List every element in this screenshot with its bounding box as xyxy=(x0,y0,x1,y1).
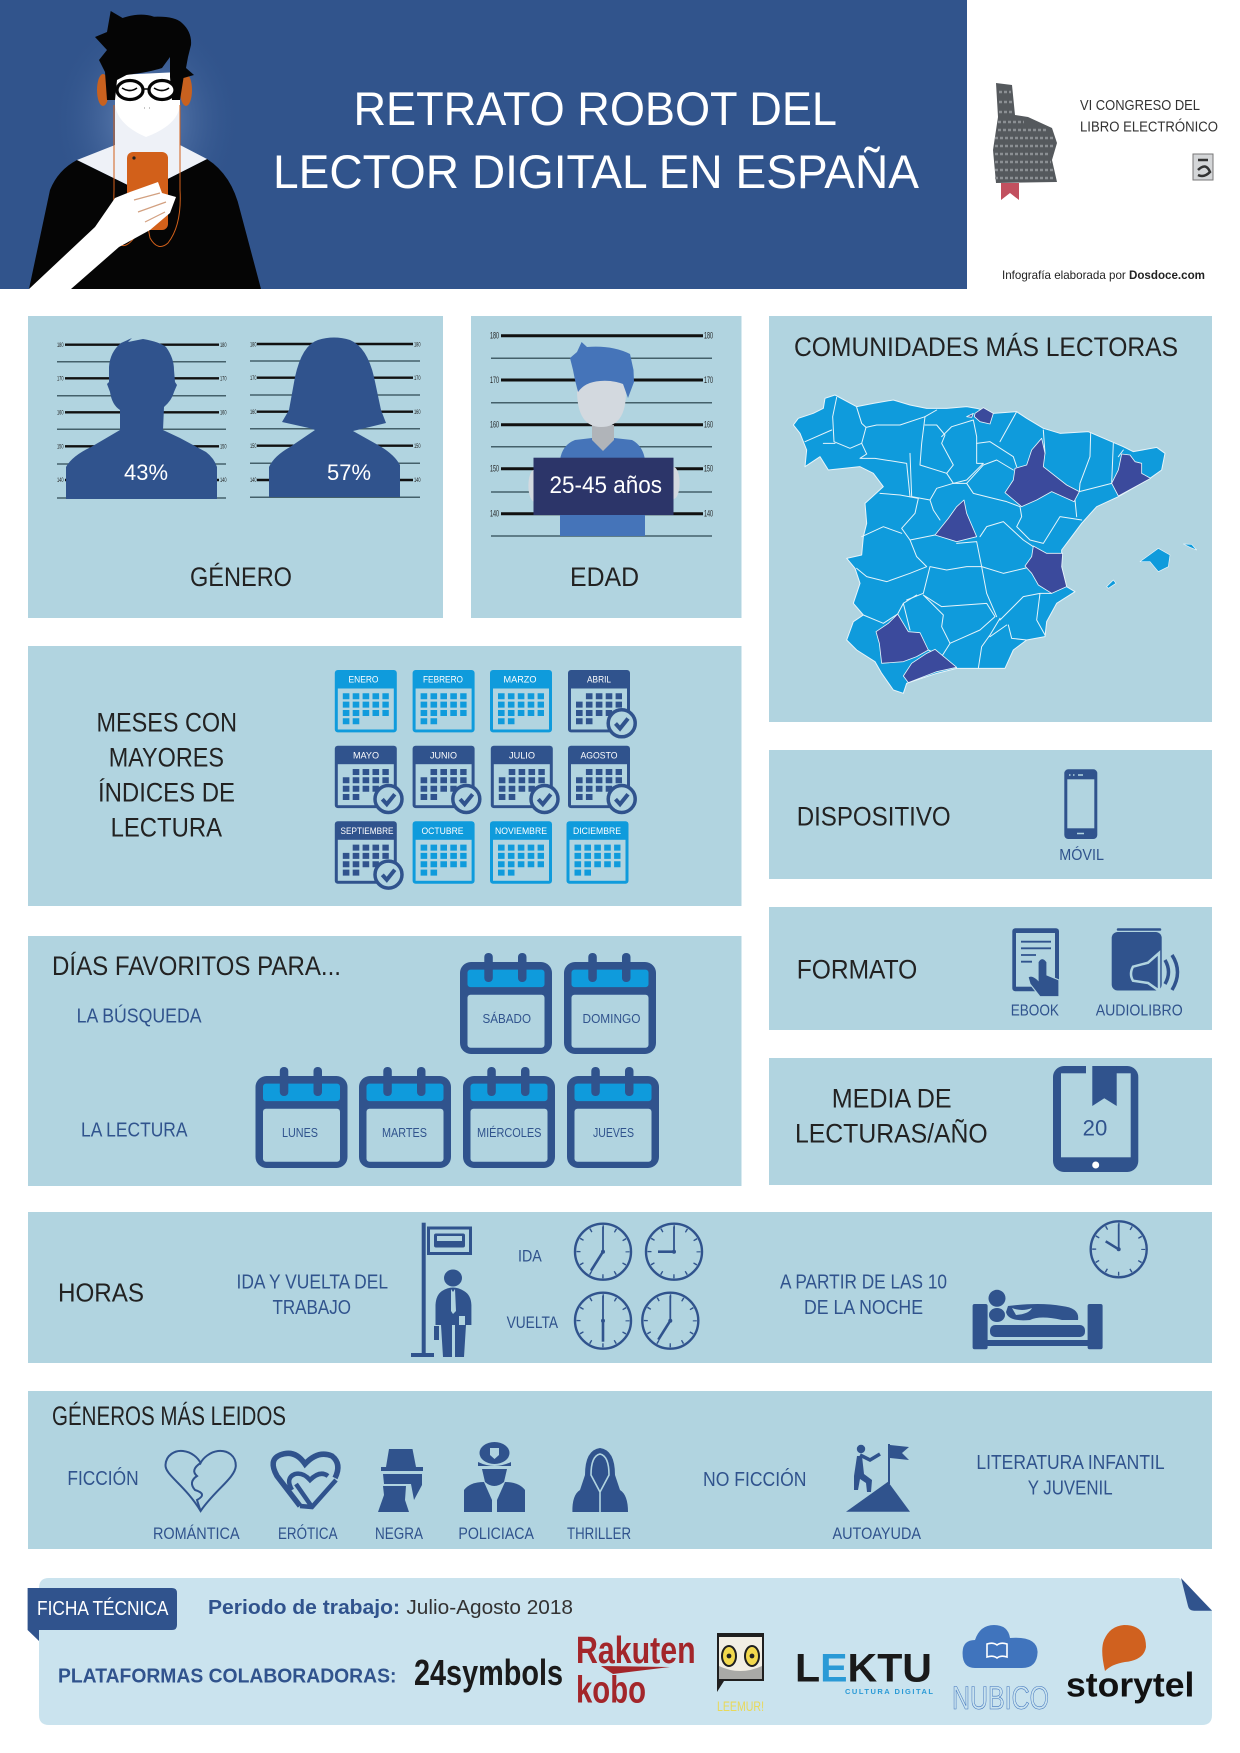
height chart: male xyxy=(57,343,227,498)
calendar icons: days: JUEVES xyxy=(593,1126,634,1140)
illustration: reader with phone and headphones xyxy=(29,11,261,289)
calendar icons: days: LUNES xyxy=(282,1126,318,1140)
label: negra: NEGRA xyxy=(375,1524,424,1543)
logo: lektu: LEKTU xyxy=(795,1647,932,1691)
calendar icons: days: SÁBADO xyxy=(482,1011,531,1026)
logo: rakuten kobo: Rakuten xyxy=(576,1630,696,1672)
panel: géneros más leídos xyxy=(28,1391,1212,1549)
heading: edad: EDAD xyxy=(570,562,639,592)
logo: nubico xyxy=(952,1625,1049,1716)
heading: género: GÉNERO xyxy=(190,562,292,592)
month calendars: AGOSTO xyxy=(580,750,618,762)
label: literatura infantil: Y JUVENIL xyxy=(1028,1477,1113,1499)
map of Spain xyxy=(793,395,1197,693)
text: plataformas colaboradoras: PLATAFORMAS COLABORADORAS: xyxy=(58,1666,396,1688)
height chart: female: 170 xyxy=(250,376,257,382)
month calendars: ABRIL xyxy=(587,674,611,686)
height chart: female: 180 xyxy=(250,342,257,348)
heading: formato: FORMATO xyxy=(797,954,917,984)
heading: dispositivo: DISPOSITIVO xyxy=(797,802,951,832)
height chart: male: 140 xyxy=(220,478,227,484)
panel: edad xyxy=(471,316,742,618)
heading: géneros: GÉNEROS MÁS LEIDOS xyxy=(52,1401,286,1431)
logo: nubico: NUBICO xyxy=(952,1680,1049,1716)
month calendars: ENERO xyxy=(348,674,378,686)
clock: 6:00 xyxy=(575,1293,631,1349)
heading: media de lecturas: MEDIA DE xyxy=(832,1084,952,1114)
logo: rakuten kobo: kobo xyxy=(576,1670,646,1712)
heading: días favoritos: DÍAS FAVORITOS PARA... xyxy=(52,951,341,981)
text: a partir de las 10: DE LA NOCHE xyxy=(804,1297,923,1319)
height chart: female: 160 xyxy=(250,410,257,416)
height chart: male: 180 xyxy=(220,343,227,349)
figure holding sign xyxy=(528,342,680,536)
icon: hooded figure xyxy=(572,1448,628,1512)
label: policiaca: POLICIACA xyxy=(458,1524,535,1543)
label: audiolibro: AUDIOLIBRO xyxy=(1096,1003,1183,1020)
text: ida y vuelta: TRABAJO xyxy=(272,1297,351,1319)
heading: meses xyxy=(96,708,237,843)
height chart: edad: 160 xyxy=(490,420,499,430)
icon: ebook xyxy=(1012,928,1059,997)
height chart: edad: 180 xyxy=(490,330,499,340)
month calendars xyxy=(335,670,635,888)
height chart: male: 160 xyxy=(57,410,64,416)
heading: horas: HORAS xyxy=(58,1278,144,1308)
label: ficción: FICCIÓN xyxy=(67,1467,139,1490)
silhouette: male xyxy=(66,338,217,499)
label: autoayuda: AUTOAYUDA xyxy=(832,1524,922,1543)
credit line: Infografía elaborada por Dosdoce.com xyxy=(1002,268,1205,282)
panel: género xyxy=(28,316,443,618)
height chart: female xyxy=(250,342,421,497)
label: la lectura: LA LECTURA xyxy=(81,1120,188,1142)
height chart: male: 150 xyxy=(57,444,64,450)
logo: lektu: CULTURA DIGITAL xyxy=(845,1687,933,1696)
height chart: male: 180 xyxy=(57,343,64,349)
label: no ficción: NO FICCIÓN xyxy=(703,1468,806,1491)
height chart: edad: 170 xyxy=(490,375,499,385)
height chart: edad: 150 xyxy=(704,464,713,474)
clock: 7:00 xyxy=(642,1293,698,1349)
text: a partir de las 10 xyxy=(780,1271,947,1319)
month calendars: MAYO xyxy=(353,750,379,762)
text: periodo de trabajo: Periodo de trabajo: xyxy=(208,1597,400,1619)
calendar icons: days: DOMINGO xyxy=(582,1012,641,1026)
month calendars: NOVIEMBRE xyxy=(495,826,547,837)
logo: 24symbols: 24symbols xyxy=(414,1652,563,1693)
label: móvil: MÓVIL xyxy=(1059,845,1104,864)
heading: meses: ÍNDICES DE xyxy=(98,778,235,808)
height chart: edad: 140 xyxy=(490,508,499,518)
icon: commuter at bus stop xyxy=(411,1223,471,1357)
panel: ficha técnica xyxy=(28,1578,1212,1725)
height chart: edad: 180 xyxy=(704,330,713,340)
clock: 9:00 xyxy=(646,1224,702,1280)
label: ebook: EBOOK xyxy=(1011,1003,1059,1020)
stat: 43%: 43% xyxy=(124,460,168,485)
ribbon tag xyxy=(28,1588,177,1641)
calendar icons: days xyxy=(256,953,659,1168)
icon: double heart xyxy=(273,1453,338,1507)
height chart: female: 180 xyxy=(414,342,421,348)
logo: leemur: LEEMUR! xyxy=(717,1698,764,1714)
logo text xyxy=(1080,97,1218,136)
month calendars: JULIO xyxy=(509,750,535,762)
month calendars: DICIEMBRE xyxy=(573,826,621,837)
panel: horas xyxy=(28,1212,1212,1363)
title: LECTOR DIGITAL EN ESPAÑA xyxy=(273,145,920,198)
clock: 7:00 xyxy=(575,1224,631,1280)
congress logo xyxy=(993,83,1218,200)
label: ida: IDA xyxy=(518,1248,542,1266)
height chart: female: 140 xyxy=(250,478,257,484)
label: thriller: THRILLER xyxy=(567,1524,631,1543)
height chart: male: 160 xyxy=(220,410,227,416)
heading: meses: LECTURA xyxy=(111,813,222,843)
label: vuelta: VUELTA xyxy=(507,1314,558,1332)
icon: detective xyxy=(378,1449,423,1512)
heading: meses: MAYORES xyxy=(109,743,224,773)
heading: comunidades: COMUNIDADES MÁS LECTORAS xyxy=(794,332,1178,362)
heading: media de lecturas xyxy=(795,1084,988,1149)
month calendars: OCTUBRE xyxy=(422,826,464,837)
label: erótica: ERÓTICA xyxy=(278,1524,338,1543)
height chart: male: 150 xyxy=(220,444,227,450)
text: ida y vuelta: IDA Y VUELTA DEL xyxy=(236,1271,388,1293)
icon: broken heart puzzle xyxy=(165,1451,236,1511)
title: RETRATO ROBOT DEL xyxy=(354,82,837,135)
sign text: age range: 25-45 años xyxy=(550,472,662,499)
height chart: male: 140 xyxy=(57,478,64,484)
label: literatura infantil: LITERATURA INFANTIL xyxy=(976,1452,1165,1474)
month calendars: SEPTIEMBRE xyxy=(340,826,394,837)
clock: 10:00 xyxy=(1091,1221,1147,1277)
panel: comunidades más lectoras xyxy=(769,316,1212,722)
height chart: male: 170 xyxy=(220,376,227,382)
height chart: edad: 140 xyxy=(704,508,713,518)
panel: días favoritos xyxy=(28,936,742,1186)
page fold corner xyxy=(1181,1578,1212,1611)
height chart: male: 170 xyxy=(57,376,64,382)
height chart: female: 150 xyxy=(250,444,257,450)
height chart: female: 150 xyxy=(414,444,421,450)
icon: police officer xyxy=(464,1442,525,1512)
stat: 20: 20 xyxy=(1083,1116,1107,1141)
heading: meses: MESES CON xyxy=(96,708,237,738)
icon: phone xyxy=(1064,769,1097,839)
height chart: edad xyxy=(490,330,713,536)
heading: media de lecturas: LECTURAS/AÑO xyxy=(795,1118,988,1149)
height chart: female: 140 xyxy=(414,478,421,484)
month calendars: FEBRERO xyxy=(423,674,463,686)
logo text: LIBRO ELECTRÓNICO xyxy=(1080,118,1218,136)
label: la búsqueda: LA BÚSQUEDA xyxy=(77,1005,202,1028)
height chart: edad: 160 xyxy=(704,420,713,430)
panel: dispositivo xyxy=(769,750,1212,879)
title xyxy=(273,82,920,198)
header banner xyxy=(0,0,967,289)
silhouette: female xyxy=(269,338,400,497)
calendar icons: days: MIÉRCOLES xyxy=(477,1125,542,1140)
panel: formato xyxy=(769,907,1212,1030)
month calendars: MARZO xyxy=(504,674,536,686)
text: a partir de las 10: A PARTIR DE LAS 10 xyxy=(780,1271,947,1293)
label: literatura infantil xyxy=(976,1452,1165,1499)
text: periodo de trabajo: Julio-Agosto 2018 xyxy=(406,1597,573,1619)
label: romántica: ROMÁNTICA xyxy=(153,1524,240,1543)
icon: audiobook xyxy=(1112,930,1178,991)
height chart: edad: 150 xyxy=(490,464,499,474)
height chart: female: 170 xyxy=(414,376,421,382)
logo: leemur xyxy=(717,1633,764,1714)
stat: 57%: 57% xyxy=(327,460,371,485)
logo: rakuten kobo xyxy=(576,1630,696,1712)
panel: meses xyxy=(28,646,742,906)
icon: tablet with bookmark xyxy=(1053,1064,1138,1172)
icon: climber with flag xyxy=(846,1444,910,1512)
icon: small publisher mark xyxy=(1193,154,1213,180)
icon: person in bed xyxy=(973,1290,1103,1349)
text: ida y vuelta xyxy=(236,1271,388,1319)
logo text: VI CONGRESO DEL xyxy=(1080,97,1200,114)
height chart: female: 160 xyxy=(414,410,421,416)
height chart: edad: 170 xyxy=(704,375,713,385)
logo: storytel: storytel xyxy=(1066,1667,1194,1705)
logo: storytel xyxy=(1066,1625,1194,1705)
panel: media de lecturas xyxy=(769,1058,1212,1185)
calendar icons: days: MARTES xyxy=(382,1126,427,1140)
month calendars: JUNIO xyxy=(430,750,457,762)
ribbon tag: FICHA TÉCNICA xyxy=(37,1597,169,1620)
